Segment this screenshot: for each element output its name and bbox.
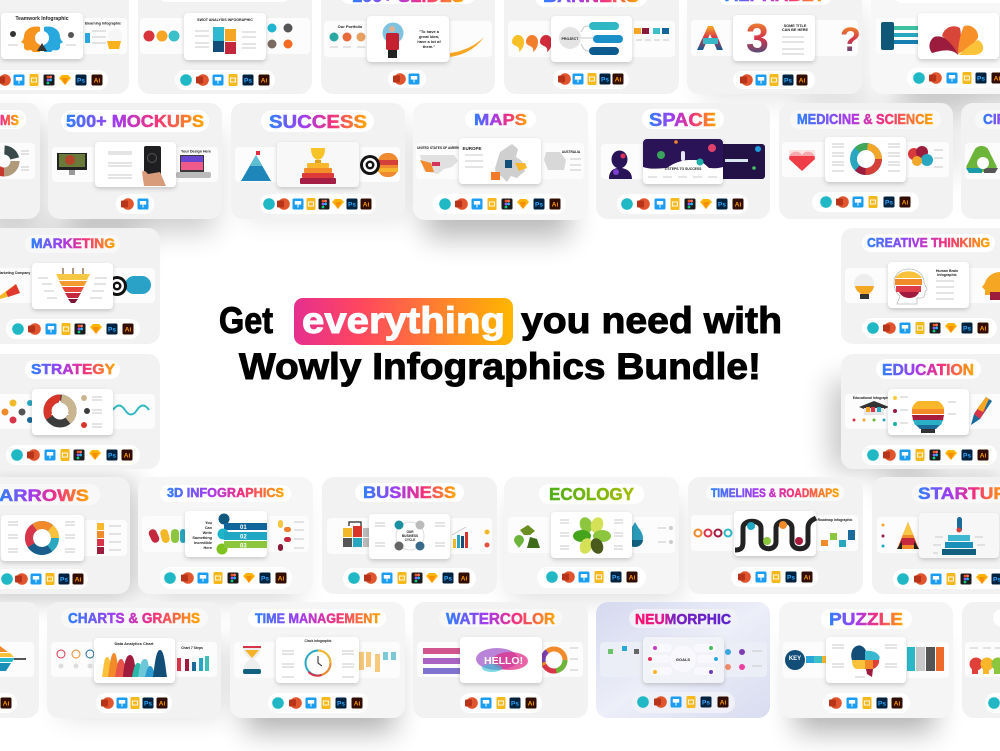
toolbar — [812, 192, 919, 212]
back slide: triangle cycle — [965, 143, 1000, 179]
toolbar: Ai — [354, 700, 360, 707]
toolbar: Ps — [878, 700, 886, 707]
back slide: arrow funnel — [0, 642, 34, 677]
back slide: rocket — [877, 517, 1000, 553]
toolbar — [553, 70, 629, 89]
toolbar — [6, 445, 140, 465]
front slide: swot: SWOT ANALYSIS INFOGRAPHIC — [197, 18, 253, 22]
title: MEDICINE & SCIENCE — [797, 112, 933, 128]
back slide: ring — [0, 143, 35, 179]
toolbar: Ai — [261, 77, 267, 84]
back slide: speech bubbles and tags — [508, 21, 675, 57]
front slide: number three: CAN BE HERE — [782, 28, 809, 32]
title: ARROWS — [0, 486, 89, 505]
toolbar — [96, 693, 172, 713]
front slide: europe map — [459, 138, 541, 184]
toolbar: Ps — [511, 700, 519, 707]
toolbar: Ai — [278, 575, 284, 582]
panel: 500+ mockups card — [48, 103, 222, 219]
back slide: briefcase and bars — [327, 518, 492, 554]
toolbar: Ai — [980, 452, 986, 459]
toolbar — [537, 567, 646, 588]
toolbar — [260, 194, 376, 214]
panel: arrows card — [0, 477, 130, 594]
front slide: quote and idea bulb: them." — [423, 44, 435, 49]
toolbar: Ai — [629, 574, 635, 581]
back slide: grad cap and pencil: Educational Infographic — [853, 396, 891, 400]
title: CHARTS & GRAPHS — [68, 611, 200, 627]
title: EDUCATION — [882, 362, 974, 379]
toolbar: Ai — [124, 452, 130, 459]
back slide: dots and cylinders: Roadmap Infographic — [818, 518, 853, 522]
title: PUZZLE — [829, 609, 903, 629]
back slide: coloured heads — [965, 642, 1000, 677]
title: 500+ MOCKUPS — [66, 111, 204, 131]
front slide: medical wheel — [825, 137, 906, 182]
front slide: quote and idea bulb: "To have a — [419, 29, 440, 34]
back slide: letter A and question mark — [691, 20, 861, 59]
toolbar — [460, 693, 542, 713]
card background — [0, 103, 40, 219]
front slide: three bands: Write — [203, 531, 212, 535]
front slide: three bands — [185, 511, 267, 557]
toolbar — [617, 194, 748, 214]
toolbar: Ps — [963, 452, 971, 459]
heading line one — [219, 300, 782, 341]
heading line one: everything — [302, 300, 505, 341]
front slide: winding road — [734, 511, 816, 556]
front slide: three bands: Can — [205, 526, 213, 530]
title: TIMELINES & ROADMAPS — [711, 486, 839, 500]
back slide: monitor and laptop — [52, 147, 218, 182]
title — [535, 0, 647, 7]
toolbar: Ps — [348, 201, 356, 208]
back slide: recycle and drop — [508, 517, 675, 553]
panel: banners card — [504, 0, 679, 94]
panel: marketing card — [0, 228, 160, 344]
back slide: key and tiles: KEY — [789, 656, 801, 662]
card background — [321, 0, 495, 94]
card background — [841, 228, 1000, 344]
panel: alphabet card — [687, 0, 862, 94]
toolbar: Ai — [159, 700, 165, 707]
panel: puzzle card — [779, 602, 953, 718]
front slide: three bands: 01 — [240, 525, 247, 531]
card background — [413, 103, 588, 220]
title: BUSINESS — [363, 483, 456, 502]
front slide: three bands: Incredible — [194, 541, 212, 545]
card background — [841, 354, 1000, 469]
toolbar: Ai — [902, 199, 908, 206]
toolbar: Ps — [144, 700, 152, 707]
title — [465, 110, 536, 129]
front slide: human brain: Human Brain — [936, 269, 958, 273]
toolbar — [862, 318, 997, 338]
toolbar: Ps — [444, 575, 452, 582]
front slide: project diagram — [551, 16, 632, 62]
card background — [138, 477, 313, 594]
heading line one: you need with — [521, 300, 782, 341]
front slide: data analytics chart: Data Analytics Chart — [115, 641, 154, 646]
toolbar: Ai — [804, 574, 810, 581]
panel: charts and graphs card — [47, 602, 221, 718]
back slide: ribbons — [0, 520, 127, 556]
panel: education card — [841, 354, 1000, 469]
card background — [0, 354, 160, 469]
front slide: teamwork heads: Teamwork Infographic — [16, 16, 69, 22]
back slide: portfolio — [324, 21, 492, 57]
toolbar — [160, 567, 292, 589]
panel: funnel arrow card — [0, 602, 39, 718]
toolbar: Ps — [108, 326, 116, 333]
toolbar: Ps — [885, 199, 893, 206]
front slide: number three: SOME TITLE — [784, 24, 807, 28]
toolbar: Ai — [94, 77, 100, 84]
toolbar — [862, 445, 997, 465]
toolbar — [433, 194, 566, 214]
card background — [0, 0, 129, 94]
toolbar: Ps — [535, 201, 543, 208]
panel: shapes card — [871, 0, 1000, 94]
back slide: grad cap and pencil — [845, 394, 1000, 429]
back slide: hexagons and circles — [140, 18, 310, 54]
toolbar: Ps — [718, 201, 726, 208]
title: 3D INFOGRAPHICS — [167, 486, 284, 500]
front slide: five steps space — [643, 139, 723, 184]
panel: business card — [322, 477, 497, 594]
back slide: monitor and laptop: Your Design Here — [181, 150, 211, 154]
front slide: teamwork heads — [1, 13, 83, 59]
front slide: goals hub: GOALS — [676, 657, 690, 662]
front slide: data analytics chart — [94, 638, 175, 683]
toolbar: Ai — [799, 77, 805, 84]
toolbar — [343, 568, 476, 589]
front slide: stacked steps — [919, 513, 999, 558]
title: TIME MANAGEMENT — [255, 611, 381, 626]
front slide: clock — [276, 637, 359, 683]
toolbar: Ps — [77, 77, 85, 84]
back slide: megaphone and target — [0, 268, 155, 303]
card background — [504, 477, 679, 594]
back slide: banners and ring — [417, 642, 583, 677]
card background — [962, 602, 1000, 718]
front slide: phone in hand — [95, 142, 176, 187]
panel: 3d infographics card — [138, 477, 313, 594]
panel: timelines and roadmaps card — [688, 477, 863, 594]
back slide: silhouette and rocket — [601, 144, 765, 179]
card background — [961, 103, 1000, 219]
toolbar — [733, 71, 815, 89]
toolbar: Ai — [980, 325, 986, 332]
toolbar: Ai — [125, 326, 131, 333]
front slide: hello splash: HELLO! — [484, 655, 523, 667]
title: SUCCESS — [269, 111, 367, 132]
back slide — [80, 18, 127, 54]
card background — [0, 477, 130, 594]
panel: ecology card — [504, 477, 679, 594]
back slide: bulb and head — [845, 268, 1000, 303]
toolbar — [731, 567, 818, 587]
toolbar — [907, 68, 1000, 88]
heading line two: Wowly Infographics Bundle! — [239, 346, 761, 387]
front slide: quote and idea bulb: great idea, — [419, 34, 439, 39]
panel: medicine and science card — [779, 103, 953, 219]
front slide: hello splash — [460, 637, 542, 683]
back slide: dials and bars — [51, 642, 217, 677]
toolbar: Ai — [735, 201, 741, 208]
back slide: dials and bars: Chart 7 Steps — [181, 646, 203, 650]
title: ECOLOGY — [549, 484, 634, 504]
back slide: 3d tags — [142, 516, 309, 552]
toolbar: Ps — [337, 700, 345, 707]
title: SPACE — [649, 110, 716, 130]
toolbar — [268, 693, 368, 713]
toolbar: Ps — [601, 76, 609, 83]
toolbar: Ai — [528, 700, 534, 707]
card background — [872, 477, 1000, 594]
card background — [230, 602, 405, 718]
title — [25, 360, 120, 379]
toolbar — [0, 569, 88, 589]
card background — [138, 0, 312, 94]
card background — [688, 477, 863, 594]
title: STARTUP — [918, 484, 1000, 503]
toolbar: Ai — [615, 76, 621, 83]
title: CREATIVE THINKING — [867, 235, 990, 250]
toolbar: Ps — [108, 452, 116, 459]
back slide: country maps: AUSTRALIA — [562, 150, 581, 154]
title: NEUMORPHIC — [635, 611, 731, 628]
front slide: project diagram: PROJECT — [562, 37, 579, 41]
front slide: europe map: EUROPE — [462, 146, 482, 151]
toolbar: Ps — [60, 576, 68, 583]
toolbar — [388, 70, 426, 88]
toolbar: Ai — [3, 700, 9, 707]
front slide: leaf clover — [551, 512, 632, 558]
front slide: cycle circle — [32, 389, 113, 435]
front slide: number three: 3 — [746, 15, 769, 61]
card background — [47, 602, 221, 718]
back slide: country maps: UNITED STATES OF AMERICA — [417, 146, 464, 150]
front slide: five steps space: 5 STEPS TO SUCCESS — [665, 167, 702, 171]
toolbar — [632, 692, 735, 713]
card background — [231, 103, 405, 219]
title — [0, 484, 100, 505]
title pill — [893, 0, 1000, 3]
toolbar: Ps — [963, 325, 971, 332]
title: MS — [0, 112, 19, 129]
back slide: key and tiles — [783, 642, 949, 678]
front slide: three bands: Something — [192, 536, 213, 540]
panel: startup card — [872, 477, 1000, 594]
card background — [504, 0, 679, 94]
card background — [687, 0, 862, 94]
front slide: quote and idea bulb: have a lot of — [417, 39, 441, 44]
card background — [48, 103, 222, 219]
card background — [0, 602, 39, 718]
front slide: clock: Clock Infographic — [305, 639, 332, 643]
front slide: trophy stairs — [277, 142, 359, 187]
title: STRATEGY — [31, 362, 115, 378]
front slide: sales funnel — [32, 263, 113, 309]
front slide: business cycle: CYCLE — [405, 538, 415, 542]
panel: swot card — [138, 0, 312, 94]
back slide: pyramid and target — [235, 147, 400, 182]
front slide: puzzle brain — [826, 637, 906, 683]
toolbar — [116, 194, 154, 214]
front slide: goals hub — [643, 637, 724, 683]
toolbar — [985, 693, 1000, 713]
panel: strategy card — [0, 354, 160, 469]
title pill — [157, 0, 292, 2]
back slide: heart and brain — [782, 142, 949, 177]
front slide: arrow ring — [1, 515, 84, 561]
front slide: swot — [184, 13, 266, 60]
title: MAPS — [474, 112, 527, 129]
front slide: business cycle: OUR — [406, 530, 414, 534]
panel: circles card — [961, 103, 1000, 219]
back slide: soft icons — [600, 642, 767, 677]
card background — [322, 477, 497, 594]
back slide: country maps — [416, 143, 584, 179]
panel: space card — [596, 103, 770, 219]
front slide: number three — [733, 15, 815, 61]
back slide: letter A and question mark: ? — [840, 21, 861, 59]
panel: watercolor card — [413, 602, 588, 718]
front slide: three bands: Here — [204, 546, 212, 550]
front slide: business cycle: BUSINESS — [402, 534, 418, 538]
card background — [871, 0, 1000, 94]
card background — [413, 602, 588, 718]
toolbar: Ai — [552, 201, 558, 208]
card background — [596, 602, 770, 718]
panel: diagrams card — [0, 103, 40, 219]
toolbar: Ai — [894, 700, 900, 707]
card background — [596, 103, 770, 219]
front slide: petal pie — [918, 13, 999, 59]
highlight pill — [294, 298, 513, 345]
heading line one: Get — [219, 300, 273, 341]
toolbar — [893, 569, 1000, 589]
front slide: human brain: Infographic — [937, 273, 957, 277]
toolbar: Ai — [720, 699, 726, 706]
panel: people card — [962, 602, 1000, 718]
toolbar: Ps — [787, 574, 795, 581]
panel: neumorphic card — [596, 602, 770, 718]
toolbar — [175, 70, 275, 90]
toolbar — [0, 70, 108, 90]
card background — [0, 228, 160, 344]
panel: slides card — [321, 0, 495, 94]
card background — [779, 602, 953, 718]
title: MARKETING — [31, 236, 115, 251]
panel: success card — [231, 103, 405, 219]
toolbar: Ai — [461, 575, 467, 582]
toolbar: Ps — [244, 77, 252, 84]
front slide: three bands: You — [205, 521, 213, 525]
panel: creative thinking card — [841, 228, 1000, 344]
toolbar: Ps — [977, 75, 985, 82]
toolbar: Ps — [784, 77, 792, 84]
toolbar: Ps — [702, 699, 710, 706]
title: WATERCOLOR — [446, 611, 555, 628]
toolbar: Ai — [363, 201, 369, 208]
back slide: portfolio: Our Portfolio — [338, 24, 363, 29]
back slide: dots and cylinders — [691, 515, 858, 551]
toolbar — [823, 693, 910, 713]
title pill — [993, 609, 1000, 627]
toolbar: Ps — [261, 575, 269, 582]
front slide: business cycle — [369, 514, 450, 559]
main heading — [219, 298, 782, 387]
front slide: human brain — [888, 262, 969, 308]
panel: maps card — [413, 103, 588, 220]
back slide: phone steps — [876, 18, 1000, 54]
toolbar: Ps — [612, 574, 620, 581]
panel: time management card — [230, 602, 405, 718]
front slide: light bulb — [888, 389, 969, 435]
front slide: quote and idea bulb — [367, 16, 449, 62]
front slide: three bands: 02 — [240, 534, 247, 540]
toolbar: Ai — [75, 576, 81, 583]
toolbar — [6, 319, 140, 339]
back slide: hourglass and calendar — [234, 642, 400, 678]
panel: teamwork card — [0, 0, 129, 94]
back slide: node chain and wave — [0, 394, 155, 429]
back slide: Elearning Infographic — [85, 22, 121, 26]
front slide: three bands: 03 — [240, 544, 247, 550]
card background — [779, 103, 953, 219]
